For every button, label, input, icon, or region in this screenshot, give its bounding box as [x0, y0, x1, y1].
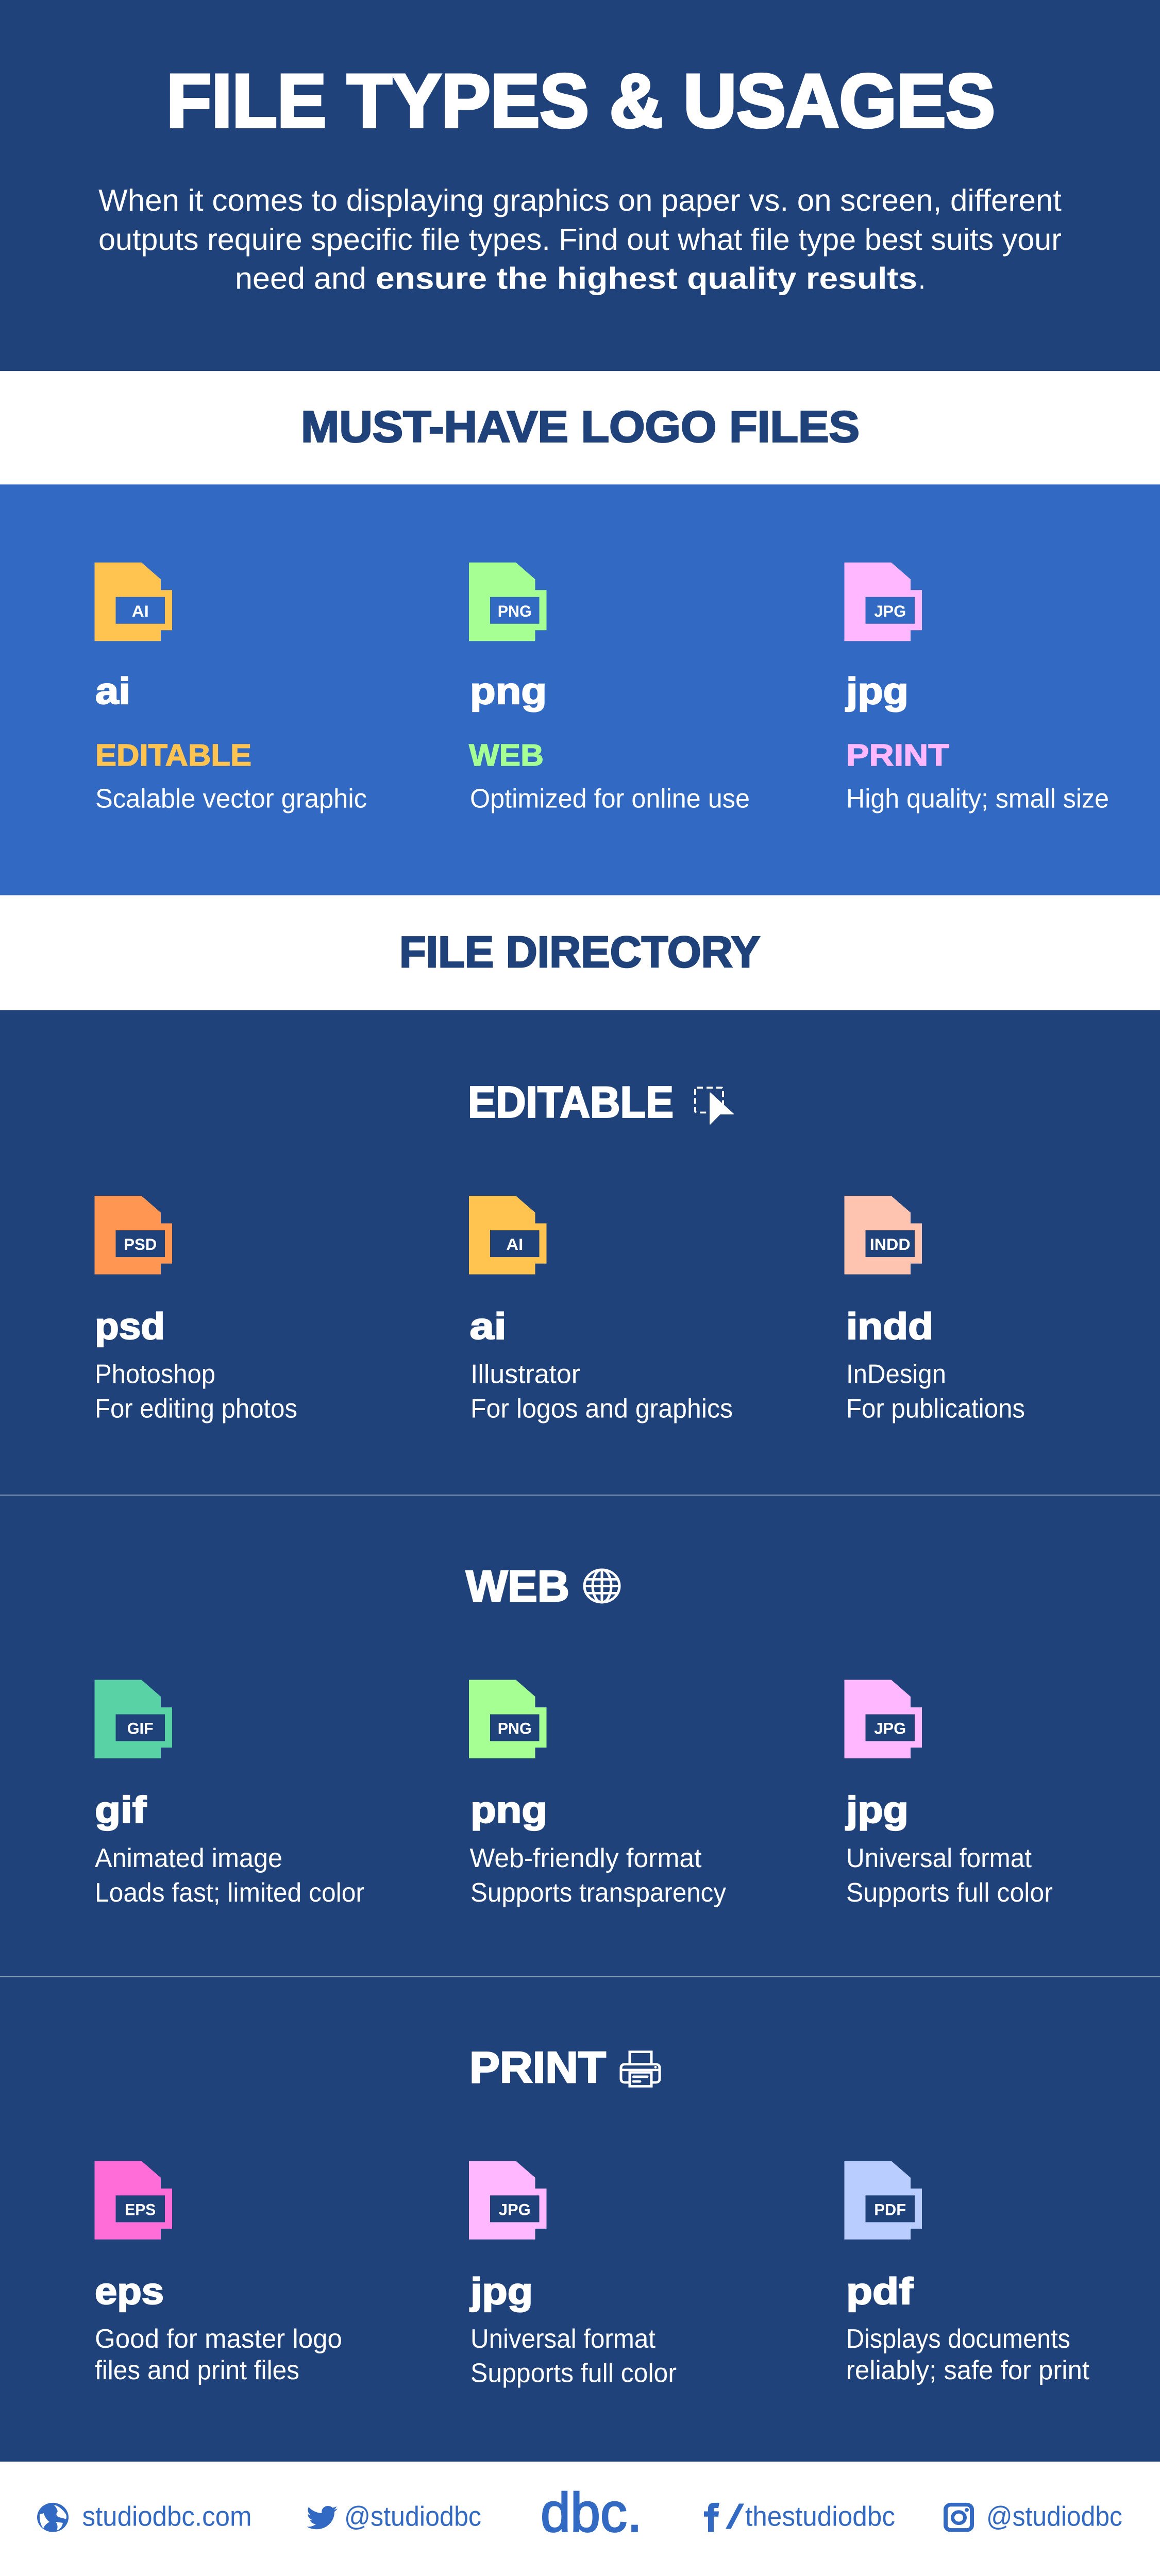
icon: indd file	[844, 1196, 922, 1275]
file card: jpg: Supports full color	[470, 2358, 677, 2388]
file card: gif: Animated image	[95, 1843, 282, 1873]
file card: jpg print	[844, 563, 1109, 814]
file card: indd: InDesign	[846, 1359, 946, 1389]
intro text block: need and	[235, 261, 366, 296]
file card: psd: For editing photos	[95, 1394, 297, 1423]
icon: jpg file: JPG	[874, 1719, 906, 1737]
file card: ai editable: ai	[95, 670, 130, 711]
file card: png web: png	[470, 670, 547, 711]
file card: pdf: Displays documents	[846, 2324, 1070, 2353]
file card: jpg	[844, 1680, 1053, 1907]
icon: website globe	[37, 2503, 69, 2532]
intro text block	[98, 183, 1062, 296]
facebook handle: thestudiodbc	[745, 2500, 895, 2532]
file card: jpg: jpg	[845, 1789, 909, 1831]
icon: psd file	[95, 1196, 172, 1275]
file card: png	[469, 1680, 726, 1907]
icon: png file	[469, 1680, 546, 1758]
panel: header	[0, 0, 1160, 371]
icon: gif file	[95, 1680, 172, 1758]
icon: png file: PNG	[498, 1719, 532, 1737]
panel: must-have logo files	[0, 484, 1160, 895]
file card: psd	[95, 1196, 297, 1423]
icon: eps file	[95, 2161, 172, 2240]
file card: png web	[469, 563, 750, 814]
file card: jpg print: PRINT	[846, 738, 949, 772]
section heading: editable: EDITABLE	[468, 1078, 674, 1127]
website text: studiodbc.com	[82, 2500, 251, 2532]
file card: png: Supports transparency	[470, 1878, 726, 1907]
file card: gif	[95, 1680, 364, 1907]
icon: ai file: AI	[506, 1235, 523, 1253]
file card: indd: For publications	[846, 1394, 1025, 1423]
file card: png web: WEB	[469, 738, 544, 772]
icon: jpg file	[469, 2161, 546, 2240]
section heading: web: WEB	[466, 1562, 569, 1611]
file card: gif: gif	[95, 1789, 147, 1831]
icon: eps file: EPS	[125, 2200, 156, 2218]
file card: pdf	[844, 2161, 1089, 2385]
intro text block: .	[918, 261, 926, 296]
file card: ai: Illustrator	[470, 1359, 580, 1389]
file card: jpg	[469, 2161, 677, 2388]
file card: jpg: jpg	[469, 2270, 533, 2312]
file card: ai: For logos and graphics	[470, 1394, 733, 1423]
file card: jpg print: High quality; small size	[846, 784, 1109, 814]
footer	[37, 2482, 1122, 2544]
file card: psd: psd	[95, 1305, 165, 1347]
intro text block: ensure the highest quality results	[376, 261, 917, 296]
file card: png: Web-friendly format	[470, 1843, 702, 1873]
file card: ai editable: EDITABLE	[95, 738, 251, 772]
logo: dbc.	[541, 2482, 642, 2544]
icon: pdf file	[844, 2161, 922, 2240]
file card: eps: eps	[95, 2270, 164, 2312]
intro text block: outputs require specific file types. Find out what file type best suits your	[98, 223, 1062, 257]
icon: twitter bird	[307, 2506, 338, 2529]
file card: jpg: Universal format	[470, 2324, 655, 2353]
icon: ai file	[95, 563, 172, 641]
file card: indd	[844, 1196, 1025, 1423]
panel: editable	[95, 1078, 1025, 1423]
panel: web	[95, 1562, 1053, 1907]
section heading: print: PRINT	[469, 2043, 606, 2092]
icon: indd file: INDD	[870, 1235, 911, 1253]
file card: jpg print: jpg	[845, 670, 909, 711]
file card: eps	[95, 2161, 342, 2385]
icon: globe	[584, 1570, 619, 1602]
file card: jpg: Supports full color	[846, 1878, 1053, 1907]
icon: jpg file	[844, 563, 922, 641]
file card: eps: files and print files	[95, 2355, 299, 2385]
icon: gif file: GIF	[127, 1719, 154, 1737]
icon: psd file: PSD	[124, 1235, 157, 1253]
heading: file directory: FILE DIRECTORY	[399, 927, 760, 976]
icon: png file	[469, 563, 546, 641]
file card: ai: ai	[470, 1305, 507, 1347]
file card: png: png	[470, 1789, 547, 1831]
file card: ai editable	[95, 563, 367, 814]
title: FILE TYPES & USAGES	[166, 59, 995, 143]
icon: ai file	[469, 1196, 546, 1275]
file card: ai	[469, 1196, 733, 1423]
file card: jpg: Universal format	[846, 1843, 1032, 1873]
icon: facebook f	[704, 2503, 719, 2532]
intro text block: When it comes to displaying graphics on paper vs. on screen, different	[98, 183, 1062, 217]
icon: png file: PNG	[498, 602, 532, 620]
file card: pdf: pdf	[846, 2270, 914, 2312]
icon: jpg file: JPG	[874, 602, 906, 620]
icon: printer	[621, 2052, 660, 2086]
icon: dashed selection with cursor	[695, 1088, 733, 1124]
file card: psd: Photoshop	[95, 1359, 215, 1389]
file card: eps: Good for master logo	[95, 2324, 342, 2353]
icon: jpg file: JPG	[499, 2200, 531, 2218]
instagram handle: @studiodbc	[986, 2500, 1122, 2532]
icon: pdf file: PDF	[874, 2200, 906, 2218]
file card: gif: Loads fast; limited color	[95, 1878, 364, 1907]
icon: ai file: AI	[132, 602, 149, 620]
file card: pdf: reliably; safe for print	[846, 2355, 1089, 2385]
file card: indd: indd	[846, 1305, 933, 1347]
heading: must-have logo files: MUST-HAVE LOGO FILES	[301, 402, 860, 451]
panel: print	[95, 2043, 1089, 2388]
facebook handle: /	[726, 2497, 745, 2536]
file card: ai editable: Scalable vector graphic	[95, 784, 367, 814]
twitter handle: @studiodbc	[344, 2500, 481, 2532]
facebook handle	[726, 2497, 895, 2536]
file card: png web: Optimized for online use	[470, 784, 750, 814]
icon: instagram	[946, 2505, 972, 2530]
icon: jpg file	[844, 1680, 922, 1758]
